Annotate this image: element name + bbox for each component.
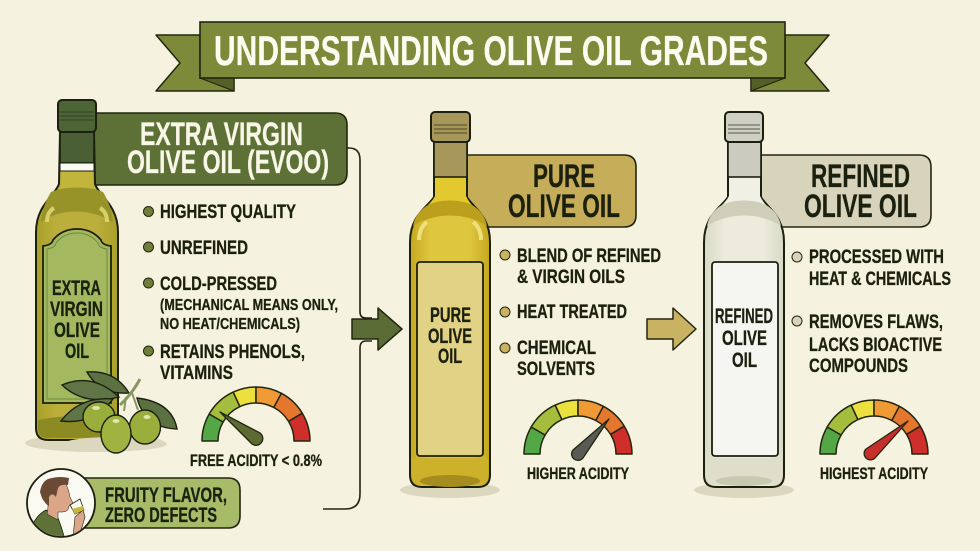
bullet list: EVOO: COLD-PRESSED (160, 273, 277, 295)
panel: pure header (460, 155, 636, 227)
bullet list: EVOO: RETAINS PHENOLS, (160, 341, 305, 363)
panel: refined header: REFINED (811, 158, 910, 194)
bullet list: EVOO (144, 201, 338, 384)
bullet list: pure: HEAT TREATED (517, 301, 627, 323)
callout: flavor pill: FRUITY FLAVOR, (105, 484, 227, 507)
bullet list: pure: BLEND OF REFINED (517, 245, 661, 267)
bullet list: refined (792, 246, 951, 377)
bullet list: EVOO: (MECHANICAL MEANS ONLY, (160, 297, 338, 314)
bottle label: refined (712, 262, 778, 456)
bullet list: pure: SOLVENTS (517, 358, 595, 380)
icon: person tasting oil (27, 469, 95, 540)
gauge: refined highest acidity: HIGHEST ACIDITY (820, 465, 928, 483)
bottle label: refined: REFINED (715, 305, 773, 328)
bottle label: refined: OLIVE (722, 327, 767, 350)
bullet list: EVOO: NO HEAT/CHEMICALS) (160, 316, 300, 333)
icon: olive branch (61, 372, 177, 453)
title banner: UNDERSTANDING OLIVE OIL GRADES (214, 27, 768, 74)
panel: EVOO header: EXTRA VIRGIN (140, 116, 303, 152)
panel: pure header: PURE (533, 158, 595, 194)
bottle label: pure: OLIVE (428, 325, 472, 348)
bullet list: EVOO: VITAMINS (160, 362, 233, 384)
callout: flavor pill: ZERO DEFECTS (105, 504, 217, 527)
bullet list: pure (500, 245, 661, 380)
bottle: refined (704, 112, 784, 487)
panel: EVOO header (90, 113, 347, 185)
bottle label: EVOO: EXTRA (52, 277, 101, 300)
bottle shadow: pure (400, 482, 500, 498)
panel: EVOO header: OLIVE OIL (EVOO) (127, 144, 329, 180)
gauge: EVOO free acidity (190, 387, 322, 470)
panel: pure header: OLIVE OIL (508, 188, 620, 224)
bottle label: EVOO: OLIVE (54, 319, 100, 342)
panel: refined header: OLIVE OIL (804, 188, 917, 224)
arrow: pure to refined (647, 308, 696, 350)
bottle label: refined: OIL (732, 349, 757, 372)
title banner (156, 22, 829, 91)
callout: flavor pill (80, 478, 240, 528)
arrow: EVOO to pure (352, 308, 402, 350)
bottle label: pure (417, 262, 483, 456)
bullet list: pure: CHEMICAL (517, 337, 596, 359)
bullet list: refined: COMPOUNDS (809, 355, 908, 377)
bottle label: EVOO: VIRGIN (50, 298, 103, 321)
connector line (323, 148, 372, 509)
gauge: refined highest acidity (820, 400, 928, 483)
bottle: pure (410, 112, 490, 487)
bullet list: EVOO: UNREFINED (160, 237, 248, 259)
bullet list: EVOO: HIGHEST QUALITY (160, 201, 296, 223)
gauge: EVOO free acidity: FREE ACIDITY < 0.8% (190, 452, 322, 470)
bottle label: EVOO (43, 229, 111, 403)
bottle label: pure: PURE (430, 304, 471, 327)
bullet list: pure: & VIRGIN OILS (517, 266, 625, 288)
panel: refined header (755, 155, 931, 227)
bottle: EVOO (36, 100, 118, 440)
bottle shadow: refined (694, 482, 794, 498)
bottle label: EVOO: OIL (65, 340, 89, 363)
bottle label: pure: OIL (438, 345, 462, 368)
gauge: pure higher acidity (524, 400, 632, 483)
bottle shadow: EVOO (25, 434, 165, 452)
gauge: pure higher acidity: HIGHER ACIDITY (527, 465, 629, 483)
